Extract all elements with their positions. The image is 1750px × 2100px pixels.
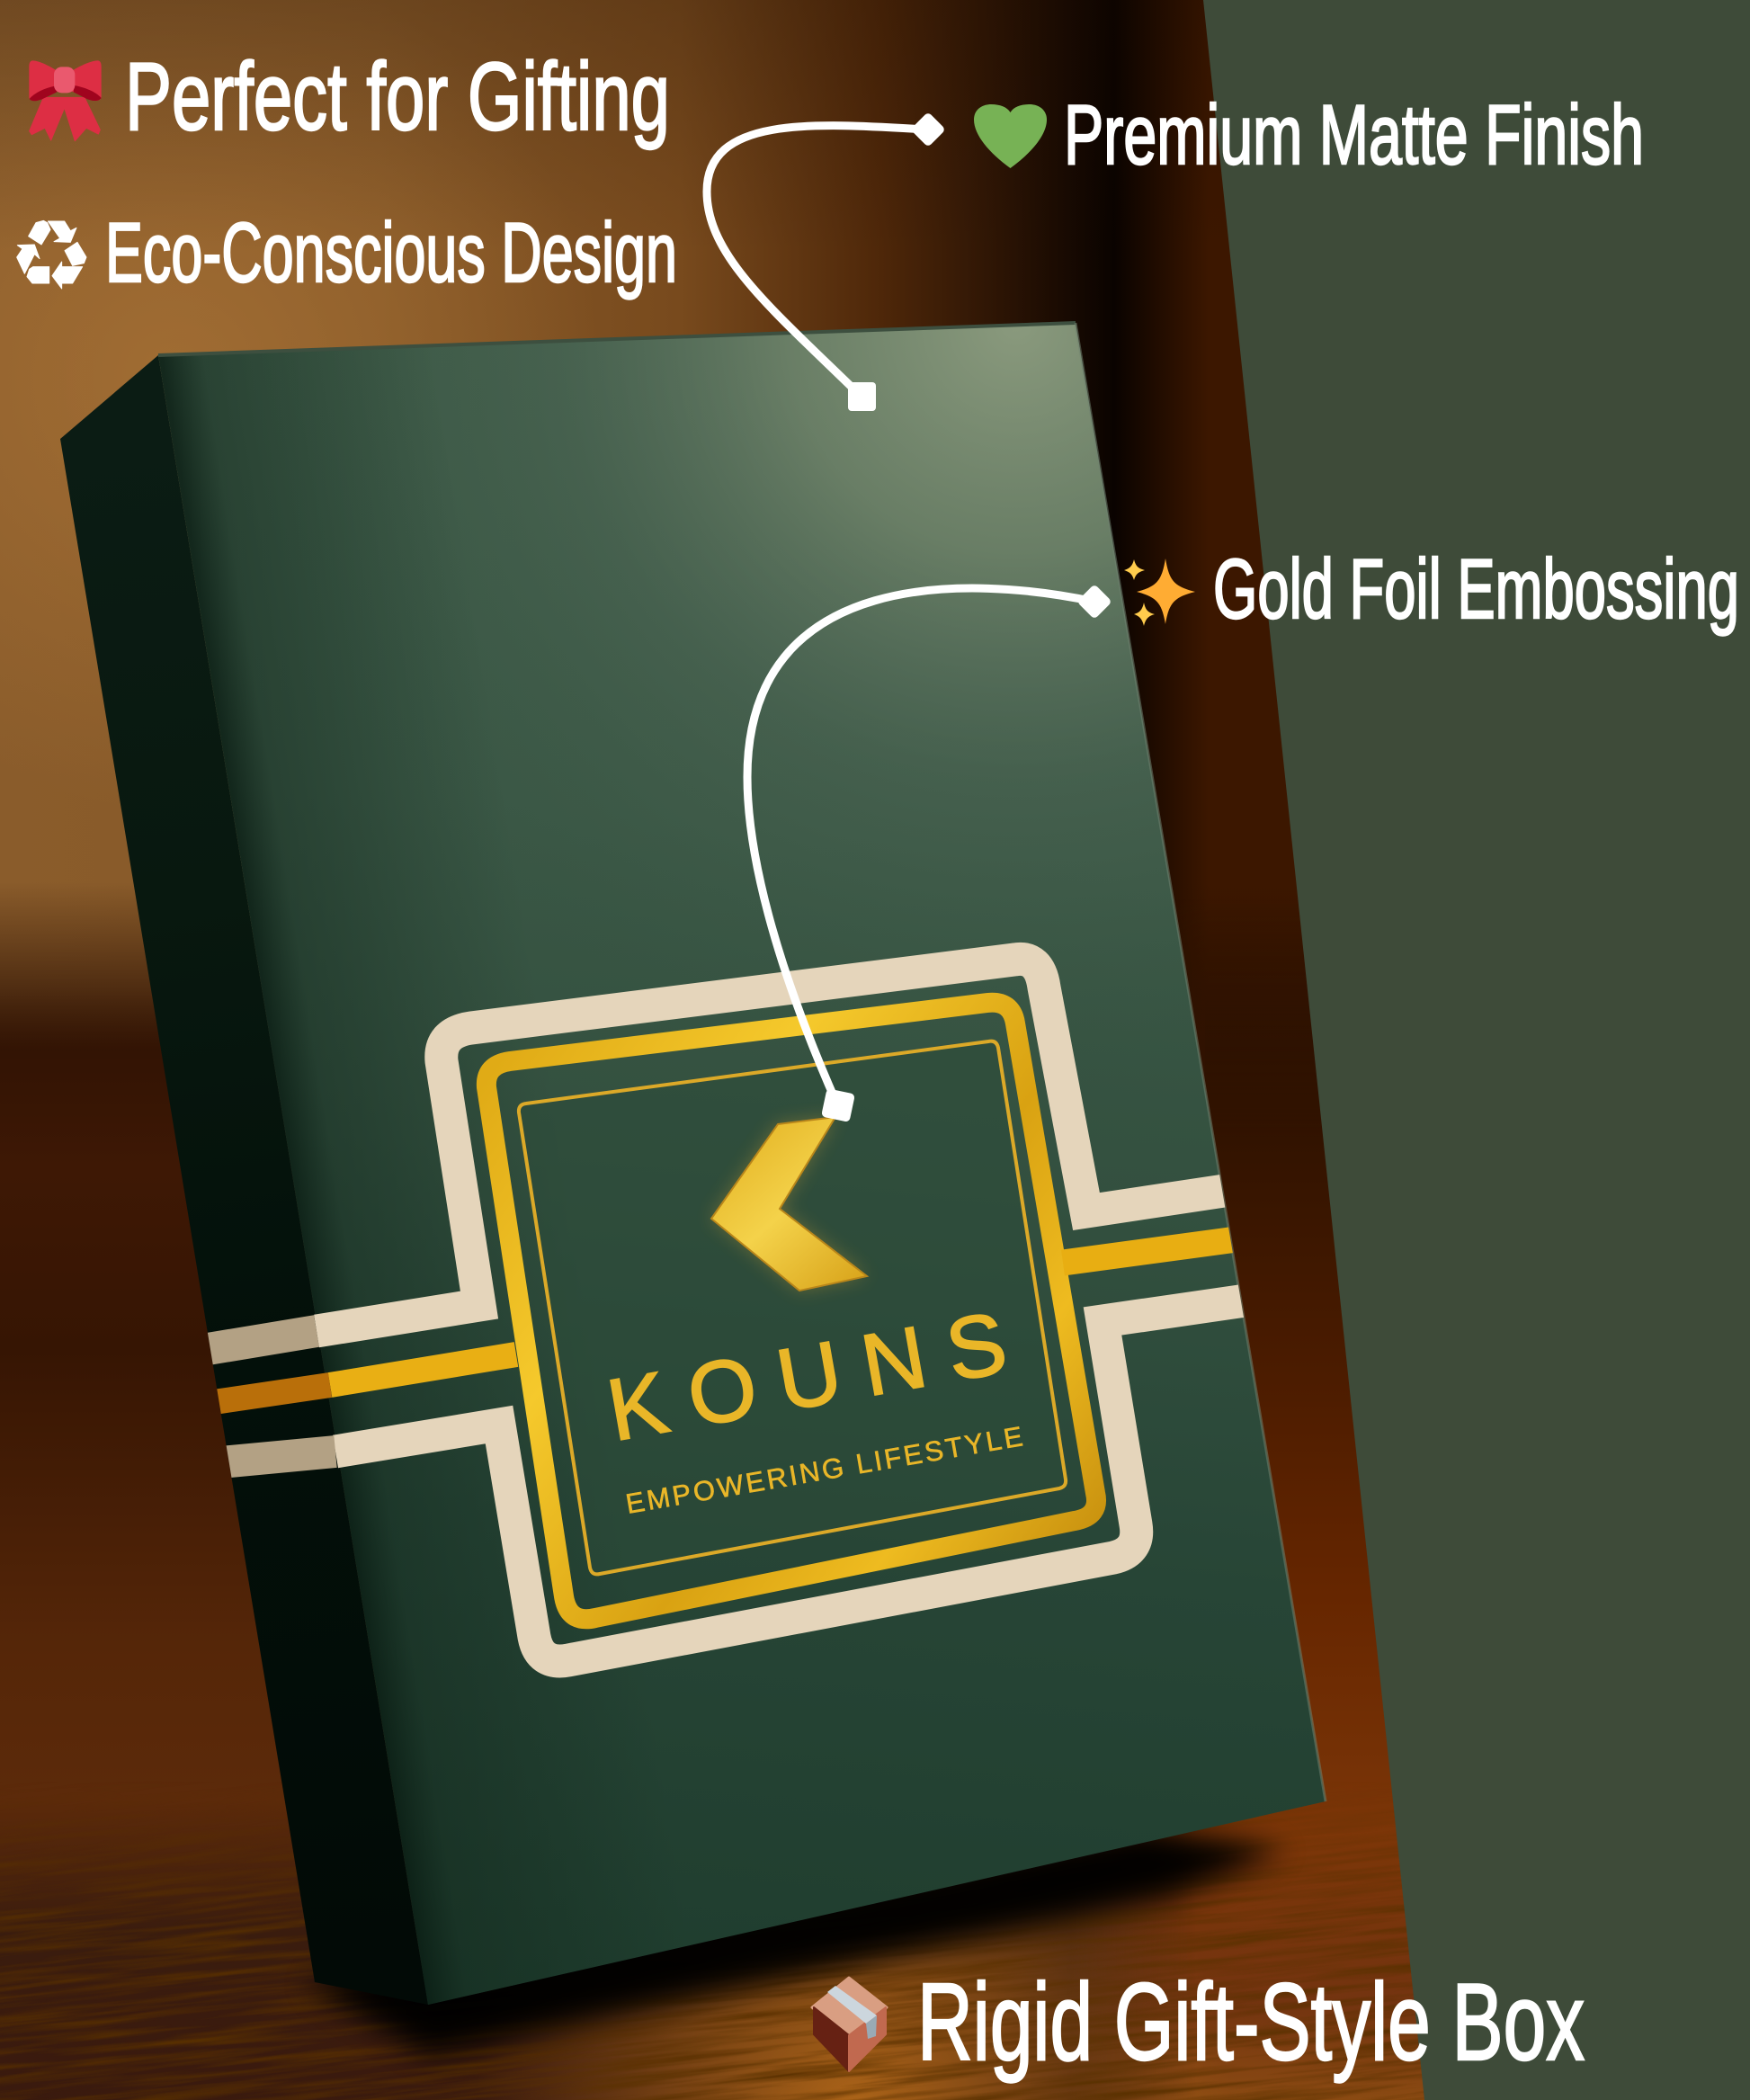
icon: package (812, 1978, 887, 2071)
callout: eco-conscious design: Eco-Conscious Design (105, 205, 677, 299)
product: gift box (60, 323, 1326, 2005)
logo: brand name: KOUNS (601, 1293, 1013, 1460)
icon: red bow (29, 60, 102, 141)
icon: green heart (974, 104, 1047, 168)
band: gold frame and stripes (214, 1003, 1237, 1619)
band: cream frame lower line (220, 1300, 1246, 1661)
callout: perfect for gifting: Perfect for Gifting (125, 42, 670, 150)
icon: sparkles (1124, 559, 1195, 626)
callout: eco-conscious design (17, 205, 677, 299)
box front face (158, 323, 1326, 2005)
panel: green right background (1203, 0, 1750, 2100)
logo: tagline: EMPOWERING LIFESTYLE (623, 1420, 1025, 1520)
icon: recycle symbol (17, 220, 86, 289)
shadow under the box (306, 1826, 1286, 2055)
band: cream frame upper line (202, 959, 1230, 1350)
callout: perfect for gifting (29, 42, 670, 150)
box side face (60, 355, 428, 2005)
arrow: premium matte finish connector (707, 112, 946, 411)
thin gold inner frame (519, 1041, 1066, 1574)
logo: gold chevron mark (711, 1117, 867, 1291)
arrow: gold foil embossing connector (747, 584, 1112, 1122)
